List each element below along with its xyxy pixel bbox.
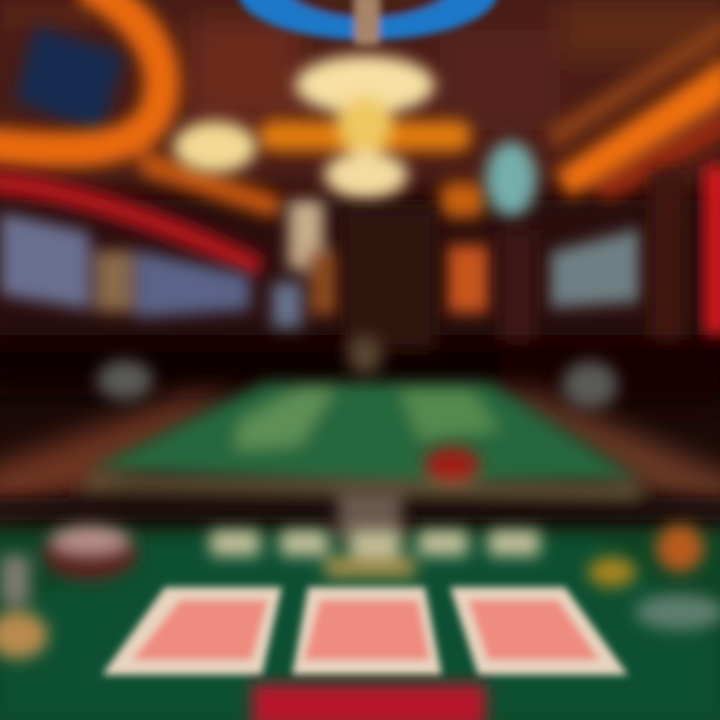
columns: [345, 170, 685, 350]
dark blue ceiling panel: [15, 25, 125, 135]
chandeliers: [173, 55, 435, 199]
ceiling background: [0, 0, 720, 195]
screen right: [550, 228, 640, 308]
grey figures at back: [97, 335, 618, 409]
brown floor: [0, 390, 720, 520]
orange lit panel: [288, 200, 489, 315]
upper table edge: [0, 447, 720, 520]
blue ceiling arc: [238, 0, 498, 45]
orange diagonal stripes right: [545, 15, 720, 200]
chips and props: [0, 524, 720, 659]
cards: [102, 587, 628, 675]
upper green table: [90, 382, 640, 486]
red banner left: [0, 182, 260, 268]
betting squares row: [210, 530, 540, 578]
teal oval: [485, 141, 537, 217]
blue-grey machines left: [0, 212, 302, 328]
lower green table: [0, 490, 720, 720]
red bottom label: [252, 684, 486, 720]
red wall panel: [704, 165, 720, 335]
orange ceiling swirl left: [0, 0, 270, 205]
mid-room dark wall band: [0, 200, 720, 410]
orange cross beam: [258, 120, 485, 218]
